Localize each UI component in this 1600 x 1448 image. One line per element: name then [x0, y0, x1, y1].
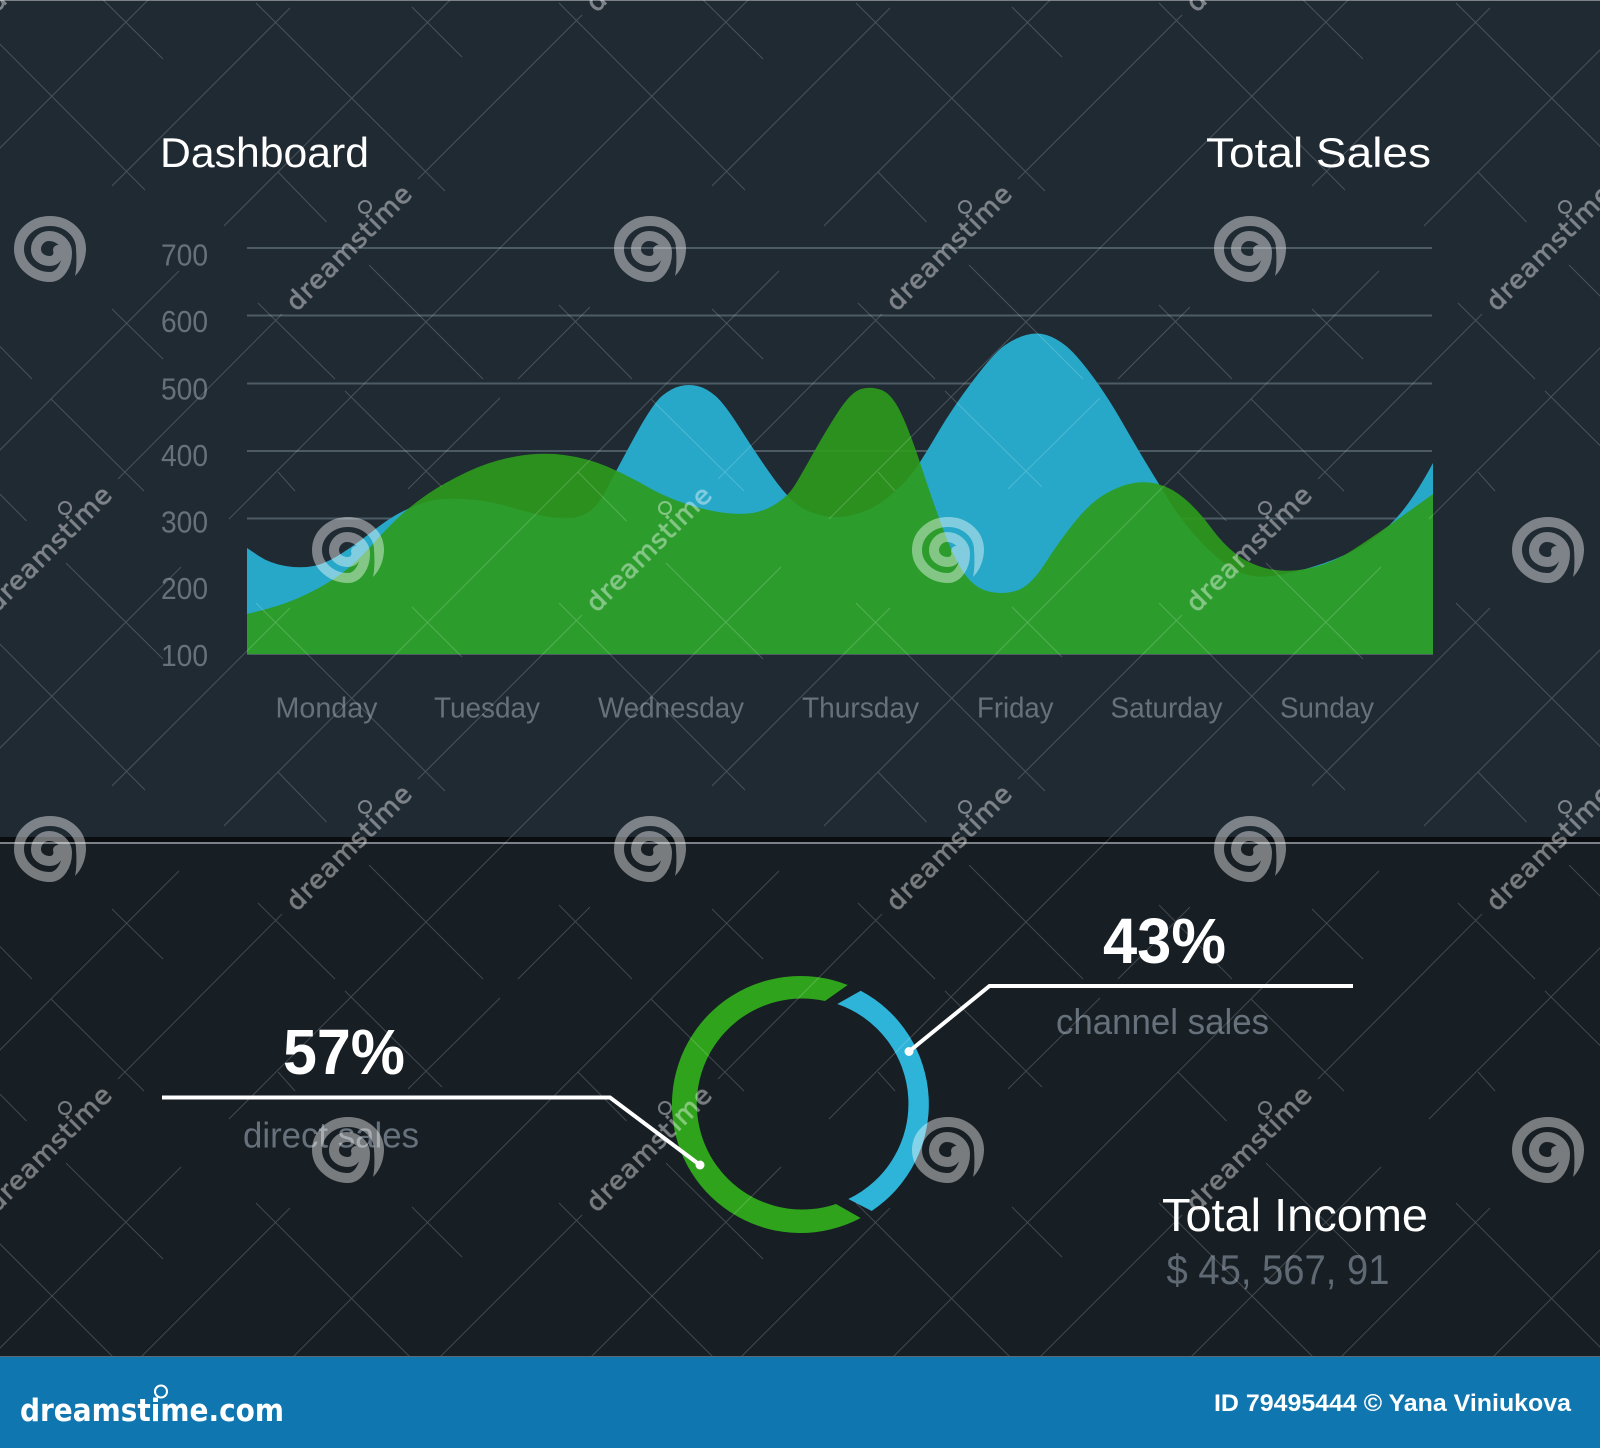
callout: direct sales — [162, 1016, 704, 1170]
watermark text: dreamstime — [580, 480, 718, 618]
x axis labels: Wednesday — [598, 692, 744, 724]
y axis labels: 200 — [161, 571, 208, 606]
callout: direct sales: 57% — [283, 1016, 405, 1088]
total income: $ 45, 567, 91 — [1166, 1246, 1390, 1293]
footer logo mark — [155, 1386, 167, 1398]
title: Dashboard: Dashboard — [160, 129, 369, 176]
chart grid lines — [247, 248, 1433, 654]
donut segment: channel sales 43% — [837, 991, 929, 1211]
watermark text: dreamstime — [1180, 480, 1318, 618]
area chart: weekly sales — [247, 248, 1433, 654]
callout: channel sales — [904, 905, 1353, 1056]
total income: Total Income — [1162, 1189, 1428, 1241]
y axis labels: 400 — [161, 438, 208, 473]
x axis labels: Friday — [977, 692, 1054, 724]
blue area series — [247, 334, 1433, 654]
y axis labels: 700 — [161, 238, 208, 272]
donut segment: direct sales 57% — [672, 976, 861, 1233]
y axis labels: 100 — [161, 638, 208, 673]
watermark text: dreamstime — [1180, 1080, 1318, 1218]
callout: channel sales: channel sales — [1056, 1001, 1269, 1042]
footer credit: ID 79495444 © Yana Viniukova — [1214, 1390, 1572, 1417]
panel: bottom summary background — [0, 838, 1600, 1357]
watermark small copyright marks — [59, 201, 1571, 1114]
watermark text: dreamstime — [880, 779, 1018, 917]
green area series — [247, 388, 1433, 654]
panel: top dashboard background — [0, 0, 1600, 838]
total income — [1162, 1189, 1428, 1293]
x axis labels: Tuesday — [434, 692, 540, 724]
y axis labels — [161, 238, 208, 673]
watermark spirals — [19, 221, 1584, 1178]
x axis labels: Saturday — [1110, 692, 1223, 724]
footer logo text: dreamstime.com — [20, 1393, 284, 1429]
footer bar — [0, 1356, 1600, 1448]
y axis labels: 500 — [161, 372, 208, 406]
x axis labels: Monday — [276, 692, 378, 724]
callout: direct sales: direct sales — [243, 1114, 419, 1156]
x axis labels: Thursday — [802, 692, 919, 724]
callout: channel sales: 43% — [1103, 905, 1226, 977]
watermark text: dreamstime — [280, 779, 418, 917]
watermark text: dreamstime — [280, 179, 418, 317]
watermark text: dreamstime — [580, 1080, 718, 1218]
donut chart — [672, 976, 929, 1233]
y axis labels: 300 — [161, 504, 208, 540]
panel divider — [0, 0, 1600, 844]
y axis labels: 600 — [161, 304, 208, 339]
x axis labels — [276, 692, 1374, 724]
watermark text: dreamstime — [880, 179, 1018, 317]
x axis labels: Sunday — [1280, 692, 1374, 724]
heading: Total Sales: Total Sales — [1206, 129, 1431, 176]
